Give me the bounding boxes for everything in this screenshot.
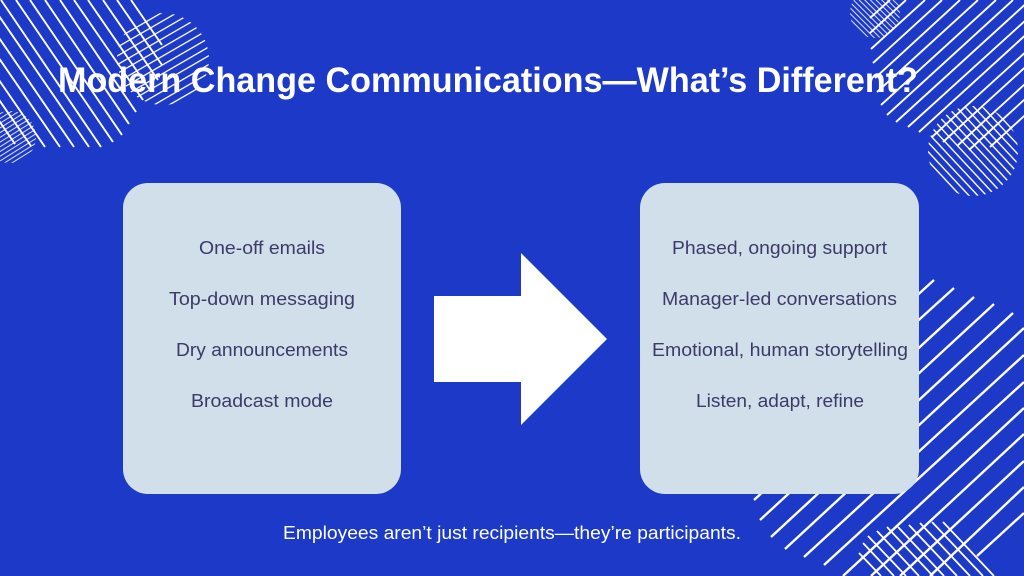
decoration: top-right stripes [850, 0, 1024, 196]
text: dry announcements: Dry announcements [176, 339, 348, 360]
text: broadcast mode: Broadcast mode [191, 390, 333, 411]
text: phased support: Phased, ongoing support [672, 237, 887, 258]
text: listen adapt refine: Listen, adapt, refine [696, 390, 864, 411]
footer statement: Employees aren’t just recipients—they’re participants. [283, 522, 741, 543]
arrow [434, 253, 607, 425]
decoration: top-left stripes [0, 0, 209, 163]
title: Modern Change Communications—What’s Different? [58, 61, 918, 100]
text: top-down messaging: Top-down messaging [169, 288, 355, 309]
text: manager-led conversations: Manager-led conversations [662, 288, 897, 309]
text: emotional storytelling: Emotional, human storytelling [652, 339, 908, 360]
text: one-off emails: One-off emails [199, 237, 325, 258]
decoration: bottom-right stripes [754, 280, 1024, 576]
panel: old approach [123, 183, 401, 494]
panel: modern approach [640, 183, 919, 494]
